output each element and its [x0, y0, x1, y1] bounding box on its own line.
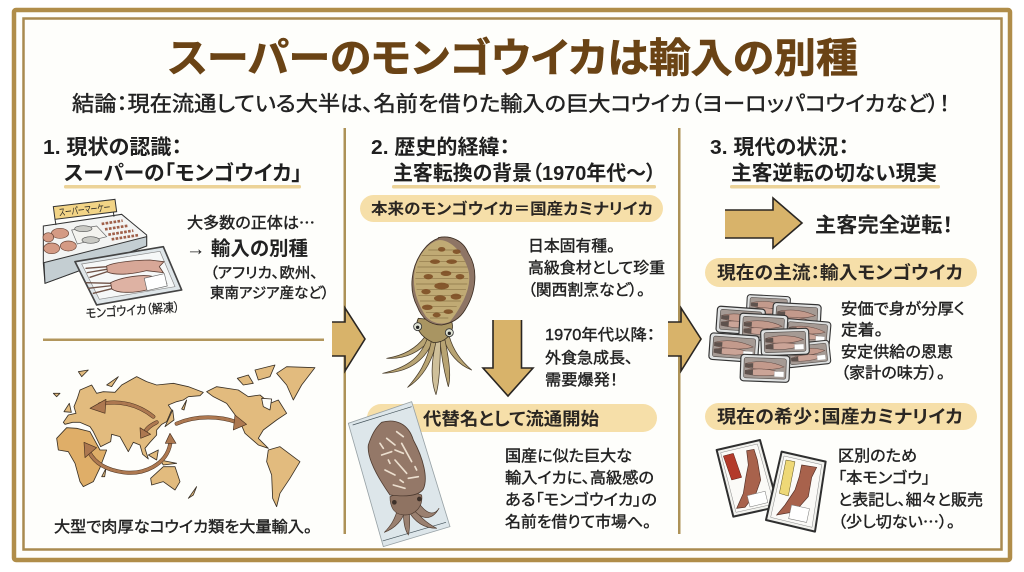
- illustration: supermarket case and tray: スーパーマーケー: [58, 202, 111, 219]
- heading: panel 3: 3. 現代の状況：: [710, 136, 849, 159]
- text: substitute description: 名前を借りて市場へ。: [505, 513, 651, 531]
- panel: 3 present situation: [705, 136, 983, 532]
- heading: panel 2: 2. 歴史的経緯：: [371, 136, 510, 159]
- heading: panel 2: 主客転換の背景（1970年代〜）: [393, 162, 656, 185]
- text: substitute description: 輸入イカに、高級感の: [505, 469, 654, 487]
- arrow: panel 1 to 2: [332, 307, 365, 372]
- illustration: frozen imported squid pack: [348, 402, 450, 547]
- text: mainstream description: [841, 300, 965, 382]
- text: domestic description: 日本固有種。: [528, 237, 615, 255]
- text: rare description: 区別のため: [838, 447, 917, 465]
- text: complete reversal: 主客完全逆転！: [815, 214, 953, 237]
- pill: original mongo squid: 本来のモンゴウイカ＝国産カミナリイカ: [371, 199, 653, 218]
- panel: 2 historical background: [348, 136, 665, 547]
- text: substitute description: 国産に似た巨大な: [505, 447, 632, 465]
- heading: panel 1: スーパーの「モンゴウイカ」: [64, 161, 302, 185]
- text: since 1970s: [545, 326, 655, 389]
- text: substitute description: [505, 447, 657, 531]
- arrow: complete reversal: [725, 198, 802, 248]
- text: mainstream description: 安価で身が分厚く: [841, 300, 965, 318]
- heading: panel 3: [710, 136, 940, 188]
- pill: original mongo squid: [360, 195, 663, 222]
- callout: true identity: 大多数の正体は…: [187, 211, 315, 233]
- tray label: モンゴウイカ（解凍）: [85, 299, 180, 321]
- pill: imported mainstream: 現在の主流：輸入モンゴウイカ: [717, 262, 963, 283]
- text: domestic description: 高級食材として珍重: [528, 259, 665, 277]
- callout: true identity: 東南アジア産など）: [210, 285, 329, 302]
- arrow: panel 2 to 3: [668, 307, 702, 372]
- text: substitute description: ある「モンゴウイカ」の: [505, 490, 657, 509]
- heading: panel 3: 主客逆転の切ない現実: [731, 162, 937, 185]
- pill: imported mainstream: [705, 258, 977, 287]
- text: mainstream description: （家計の味方）。: [841, 364, 945, 382]
- illustration: domestic squid packs: [717, 440, 826, 532]
- text: mainstream description: 安定供給の恩恵: [841, 343, 953, 361]
- text: mainstream description: 定着。: [841, 321, 883, 339]
- arrow: downward transition: [483, 320, 533, 396]
- text: rare description: 「本モンゴウ」: [838, 468, 930, 487]
- text: since 1970s: 需要爆発！: [545, 371, 618, 389]
- callout: true identity: （アフリカ、欧州、: [210, 265, 318, 282]
- map caption: 大型で肉厚なコウイカ類を大量輸入。: [54, 518, 312, 536]
- text: rare description: （少し切ない…）。: [838, 510, 955, 532]
- text: domestic description: [528, 237, 665, 299]
- panel: 1 current perception: [43, 136, 329, 536]
- pill: rare domestic: 現在の希少：国産カミナリイカ: [717, 407, 963, 427]
- pill: substitute name: 代替名として流通開始: [423, 409, 600, 429]
- illustration: stack of squid trays: [709, 295, 831, 382]
- world map with import arrows: [53, 365, 315, 507]
- text: since 1970s: 外食急成長、: [545, 349, 633, 367]
- heading: panel 1: [43, 136, 302, 188]
- illustration: domestic cuttlefish: [383, 237, 475, 395]
- text: domestic description: （関西割烹など）。: [528, 281, 645, 299]
- heading: panel 2: [371, 136, 656, 188]
- illustration: supermarket case and tray: [43, 199, 182, 305]
- pill: rare domestic: [705, 403, 977, 430]
- heading: panel 1: 1. 現状の認識：: [43, 136, 182, 159]
- text: since 1970s: 1970年代以降：: [545, 326, 655, 344]
- text: rare description: [838, 447, 983, 532]
- callout: true identity: [186, 211, 329, 302]
- title: スーパーのモンゴウイカは輸入の別種: [168, 35, 858, 81]
- pill: substitute name: [367, 404, 657, 432]
- conclusion subtitle: 結論：現在流通している大半は、名前を借りた輸入の巨大コウイカ（ヨーロッパコウイカなど）！: [72, 93, 950, 116]
- callout: true identity: → 輸入の別種: [186, 238, 308, 260]
- text: rare description: と表記し、細々と販売: [838, 491, 983, 509]
